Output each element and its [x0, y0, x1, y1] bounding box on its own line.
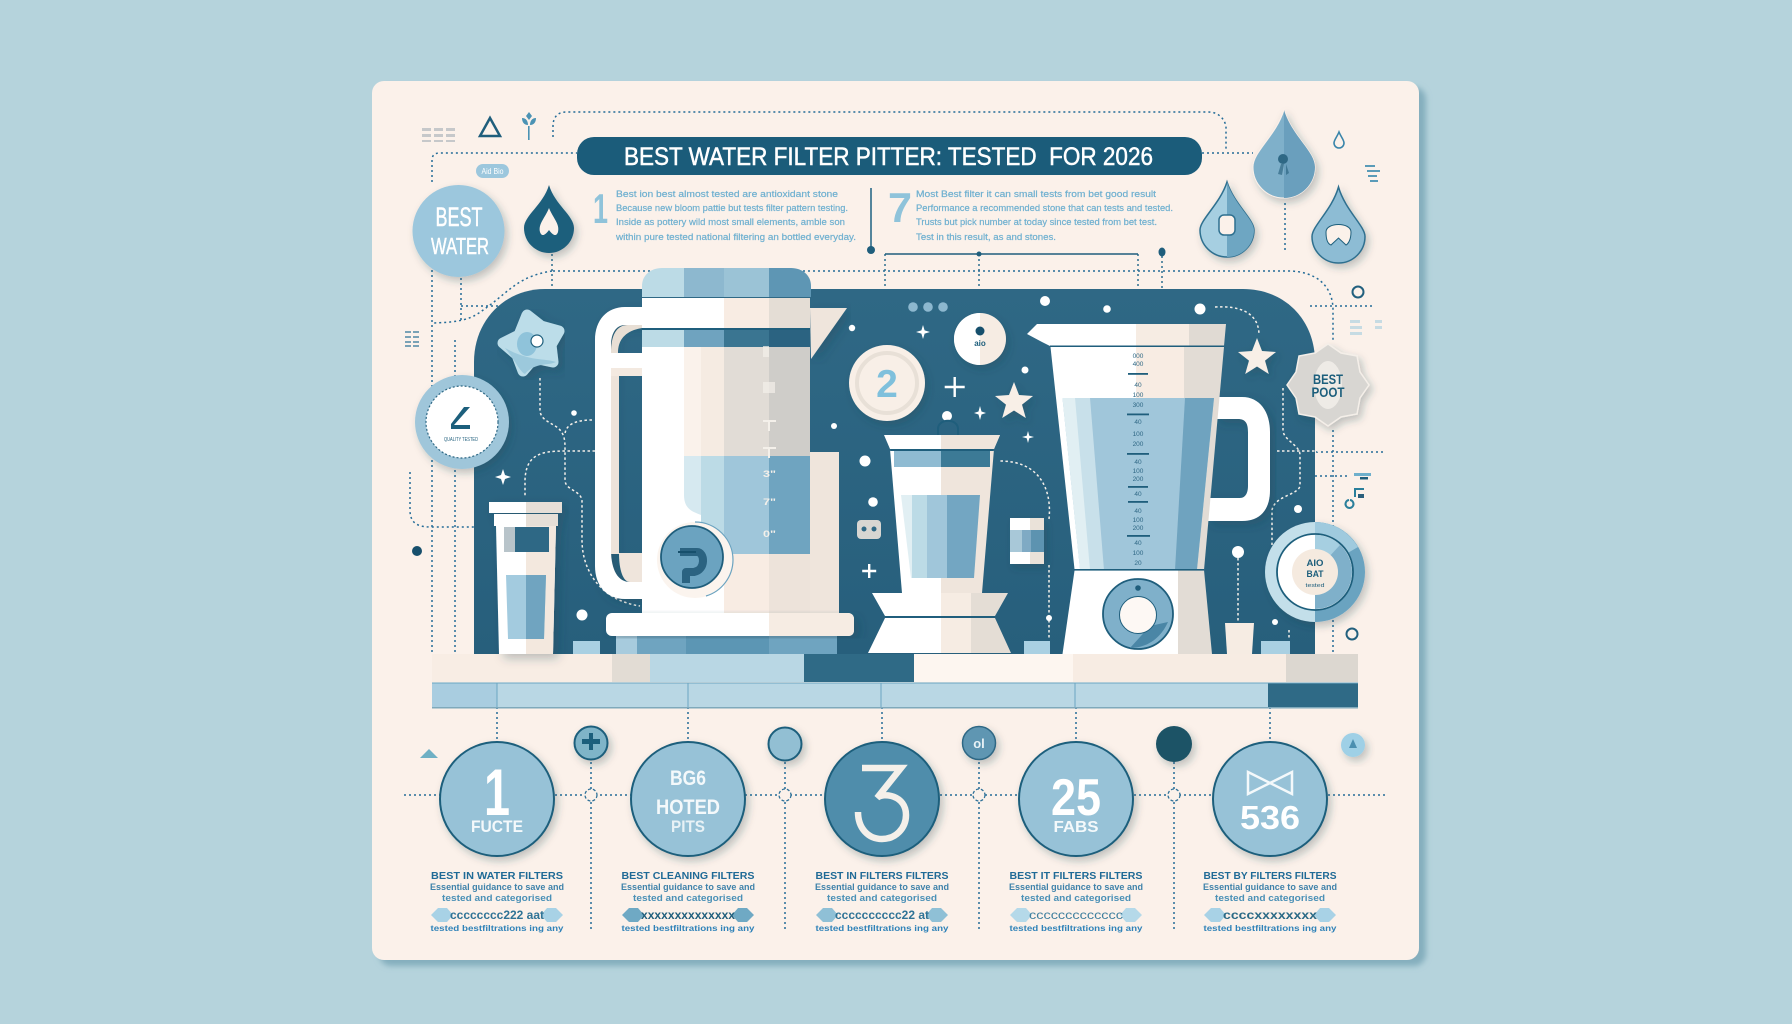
octagonal badge: [1287, 344, 1369, 426]
pitcher base: [606, 613, 854, 654]
small cylinder: [1010, 518, 1044, 564]
step caption 2: tested and categorised: [633, 893, 743, 904]
icon: mini dial: ol: [973, 736, 985, 751]
small list glyph: [1365, 165, 1380, 182]
jar measurement scale: [1127, 353, 1150, 567]
glass water: [901, 495, 980, 578]
connector small circles row: [420, 726, 1365, 762]
tag pill: [476, 164, 509, 178]
jar measurement scale: 40: [1134, 508, 1142, 515]
step caption 4: tested and categorised: [1021, 893, 1131, 904]
pitcher body: [642, 298, 839, 613]
rating pill: ccccxxxxxxxx: [1223, 908, 1317, 922]
small ring icons: [1346, 286, 1364, 640]
three blue dots: [908, 302, 948, 312]
dark scene panel: [474, 289, 1315, 654]
pitcher handle: [595, 307, 642, 599]
intro text block 1: Best ion best almost tested are antioxidant stone: [616, 189, 838, 199]
intro text block 1: within pure tested national filtering an bottled everyday.: [615, 232, 856, 242]
icon: small game glyph: [857, 520, 881, 539]
drop with filter icon: [1200, 182, 1254, 257]
jar measurement scale: 100: [1133, 517, 1144, 524]
step caption 4: BEST IT FILTERS FILTERS: [1010, 871, 1143, 882]
big drop: [1253, 110, 1315, 198]
step caption 3: tested bestfiltrations ing any: [816, 923, 949, 933]
jar dial: [1103, 579, 1173, 649]
icon: plain circle: [768, 728, 802, 760]
ring gauge badge: BAT: [1306, 569, 1324, 579]
middle glass: [860, 421, 1016, 655]
step circle 5: [1213, 742, 1327, 856]
jar measurement scale: 200: [1133, 441, 1144, 448]
step caption 4: [1009, 871, 1143, 933]
icon: triangle: [480, 118, 500, 136]
glass lid loop: [938, 421, 958, 435]
step caption 1: Essential guidance to save and: [430, 882, 564, 893]
shelf lower row: [432, 682, 1358, 708]
step circle 2: PITS: [671, 817, 705, 836]
step caption 3: tested and categorised: [827, 893, 937, 904]
step circle 1: [440, 742, 554, 856]
jar measurement scale: 40: [1134, 382, 1142, 389]
rating pill: cccccccccc22 at: [835, 908, 929, 922]
step circle 2: [631, 742, 745, 856]
small dial badge: aio: [974, 339, 986, 348]
water drops top right: [1200, 110, 1380, 263]
tag pill: Aid Bio: [482, 167, 504, 176]
jar measurement scale: 100: [1133, 468, 1144, 475]
step circle 4: 25: [1051, 769, 1101, 827]
shelf upper row: [432, 654, 1358, 682]
step caption 5: BEST BY FILTERS FILTERS: [1204, 871, 1337, 882]
step circle 1: FUCTE: [471, 817, 523, 836]
pitcher spigot: [657, 522, 733, 598]
step caption 5: tested bestfiltrations ing any: [1204, 923, 1337, 933]
step caption 3: BEST IN FILTERS FILTERS: [816, 871, 949, 882]
icon: mini dial: [962, 726, 996, 760]
faint labels right: [1350, 320, 1382, 335]
clock badge: QUALITY TESTED: [444, 437, 478, 443]
icon: triangle marker: [420, 749, 438, 758]
octagonal badge: BEST: [1313, 371, 1343, 387]
large blender jug: [1025, 322, 1270, 654]
badge: best water: WATER: [431, 233, 489, 259]
intro text block 2: 7: [888, 184, 912, 231]
badge: best water: BEST: [436, 202, 482, 232]
icon: plus circle: [574, 726, 608, 760]
small blue blocks: [573, 641, 1290, 654]
small cup right: [1225, 623, 1254, 654]
jar measurement scale: 40: [1134, 540, 1142, 547]
bracket connector: [885, 248, 1166, 256]
pitcher scale marks: 3": [763, 469, 776, 479]
jar water: [1060, 398, 1220, 570]
title text: BEST WATER FILTER PITTER: TESTED FOR 2026: [624, 143, 1153, 171]
icon: dark circle: [1156, 726, 1192, 762]
step caption 3: Essential guidance to save and: [815, 882, 949, 893]
jar measurement scale: 100: [1133, 431, 1144, 438]
glass rim: [884, 435, 1000, 449]
jar: [1040, 347, 1226, 570]
step caption 1: tested and categorised: [442, 893, 552, 904]
step circle 5: 536: [1240, 799, 1300, 836]
dark dot left: [412, 546, 422, 556]
shelf: [432, 654, 1358, 708]
step circle 2: BG6: [670, 767, 706, 790]
rating pill: cccccccc222 aat: [450, 908, 544, 922]
badge: best water: [412, 185, 504, 277]
jar measurement scale: 300: [1133, 402, 1144, 409]
jar rim: [1027, 324, 1226, 346]
jar base: [1060, 570, 1214, 654]
pitcher scale marks: [763, 346, 776, 539]
drop with arch icon: [1312, 187, 1365, 263]
step caption 1: [430, 871, 564, 933]
intro text block 1: Because new bloom pattie but tests filter pattern testing.: [616, 203, 848, 213]
jar measurement scale: 20: [1134, 560, 1142, 567]
tiny grid label: [422, 128, 455, 142]
jar measurement scale: 000: [1133, 353, 1144, 360]
step caption 2: Essential guidance to save and: [621, 882, 755, 893]
step circle 2: HOTED: [656, 796, 720, 819]
step caption 2: BEST CLEANING FILTERS: [622, 871, 755, 882]
rating pill: ccccccccccccc: [1029, 908, 1123, 922]
small glass left: [489, 502, 562, 654]
icon: water chip: [1341, 733, 1365, 757]
pitcher scale marks: 0": [763, 529, 776, 539]
jar measurement scale: 40: [1134, 419, 1142, 426]
star blob icon: [503, 315, 559, 374]
step circle 3: [825, 742, 939, 856]
step caption 5: tested and categorised: [1215, 893, 1325, 904]
stars: [995, 338, 1276, 418]
icon: sprout: [522, 112, 536, 140]
step circle 4: [1019, 742, 1133, 856]
small drop outline: [1334, 132, 1344, 148]
intro text block 1: 1: [593, 185, 608, 232]
jar measurement scale: 400: [1133, 361, 1144, 368]
junction circles: [585, 789, 1180, 801]
jar measurement scale: 40: [1134, 459, 1142, 466]
badge: number 2: 2: [876, 363, 898, 406]
intro text block 2: Most Best filter it can small tests from bet good result: [916, 189, 1157, 199]
intro text block 2: Test in this result, as and stones.: [916, 232, 1056, 242]
dashed connector network: [404, 112, 1385, 930]
main pitcher: [595, 268, 854, 654]
glass base: [868, 593, 1011, 653]
octagonal badge: POOT: [1312, 384, 1345, 400]
step caption 4: tested bestfiltrations ing any: [1010, 923, 1143, 933]
ring gauge badge: tested: [1306, 583, 1324, 589]
step circle 3: 3: [882, 799, 883, 801]
vertical divider with dot: [867, 188, 875, 254]
step circle 4: FABS: [1054, 819, 1099, 836]
ring gauge badge: [1265, 522, 1365, 622]
panel connector lines: [525, 307, 1320, 640]
jar measurement scale: 100: [1133, 392, 1144, 399]
pitcher spout: [810, 308, 847, 359]
pitcher scale marks: 7": [763, 497, 776, 507]
intro text block 1: [593, 185, 856, 242]
step caption 4: Essential guidance to save and: [1009, 882, 1143, 893]
pitcher lid: [642, 268, 811, 297]
step caption 5: [1203, 871, 1337, 933]
intro text block 2: [888, 184, 1173, 242]
icon: dark water drop: [524, 185, 574, 253]
intro text block 2: Performance a recommended stone that can tests and tested.: [916, 203, 1173, 213]
intro text block 2: Trusts but pick number at today since tested from bet test.: [916, 217, 1157, 227]
title banner: [577, 137, 1202, 175]
badge: number 2: [849, 345, 925, 421]
intro text block 1: Inside as pottery wild most small elements, amble son: [616, 217, 845, 227]
ring gauge badge: AIO: [1306, 558, 1324, 568]
step caption 1: tested bestfiltrations ing any: [430, 923, 564, 933]
rating pill: xxxxxxxxxxxxxx: [641, 908, 735, 922]
jar measurement scale: 40: [1134, 491, 1142, 498]
blender handle: [1208, 397, 1270, 521]
step caption 2: tested bestfiltrations ing any: [622, 923, 755, 933]
faint labels left: [405, 331, 419, 347]
top-left small icons: [422, 112, 536, 142]
step caption 2: [621, 871, 755, 933]
side glyphs: [1345, 473, 1371, 508]
jar measurement scale: 200: [1133, 476, 1144, 483]
step caption 1: BEST IN WATER FILTERS: [431, 871, 563, 882]
step circle 1: 1: [484, 755, 510, 829]
clock badge: [415, 375, 509, 469]
step caption 5: Essential guidance to save and: [1203, 882, 1337, 893]
small dial badge: [954, 313, 1006, 365]
step caption 3: [815, 871, 949, 933]
infographic card: [372, 81, 1419, 960]
jar measurement scale: 100: [1133, 550, 1144, 557]
glass body: [885, 449, 997, 593]
decorative dots and sparkles: [495, 296, 1302, 625]
jar measurement scale: 200: [1133, 525, 1144, 532]
